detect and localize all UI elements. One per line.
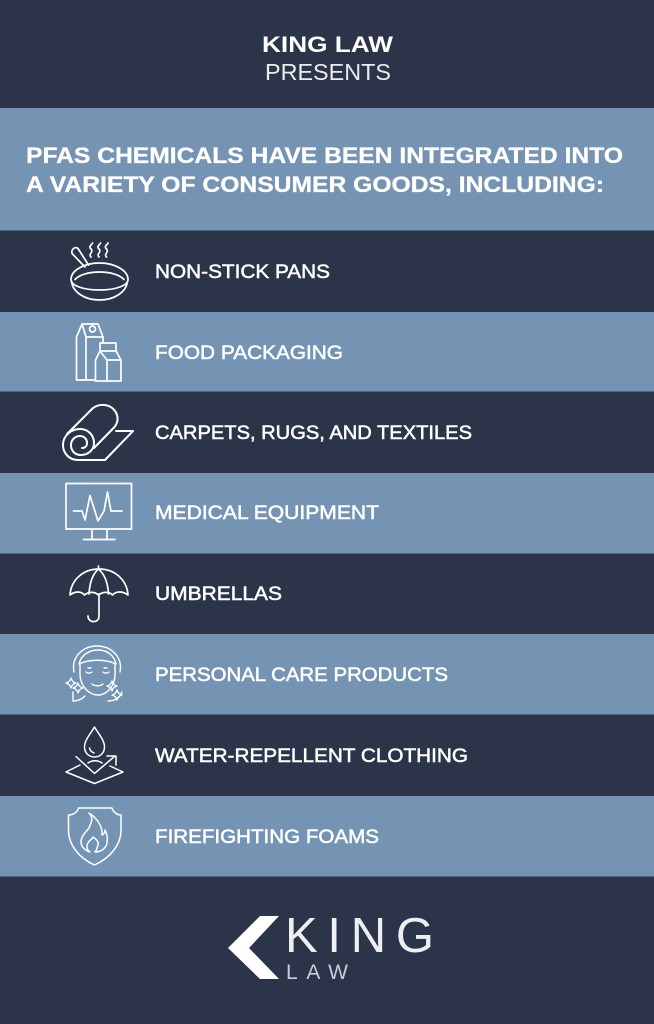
header: King Law presents: PRESENTS — [265, 59, 391, 85]
icon: frying pan — [71, 243, 128, 300]
row: water-repellent clothing: WATER-REPELLENT CLOTHING — [155, 746, 468, 767]
row: medical equipment — [0, 473, 654, 554]
row: umbrellas — [0, 554, 654, 634]
row: personal care products — [0, 634, 654, 714]
logo chevron — [228, 916, 279, 979]
icon: water drop on fabric — [66, 727, 123, 784]
row: non-stick pans — [0, 231, 654, 312]
panel: heading — [0, 108, 654, 230]
icon: face with sparkles — [66, 646, 122, 701]
icon: rolled carpet — [63, 405, 133, 460]
row: personal care products: PERSONAL CARE PRODUCTS — [155, 665, 448, 686]
icon: milk cartons — [76, 324, 121, 381]
row: non-stick pans: NON-STICK PANS — [155, 262, 330, 283]
logo: King Law — [228, 909, 434, 984]
row: umbrellas: UMBRELLAS — [155, 584, 282, 605]
row: water-repellent clothing — [0, 715, 654, 796]
logo: King Law: KING — [285, 909, 434, 963]
logo: King Law: LAW — [286, 961, 348, 984]
row: medical equipment: MEDICAL EQUIPMENT — [155, 503, 379, 524]
row: carpets, rugs, and textiles — [0, 392, 654, 472]
row: firefighting foams: FIREFIGHTING FOAMS — [155, 827, 379, 848]
row: firefighting foams — [0, 796, 654, 876]
header: King Law presents — [0, 0, 654, 108]
row: carpets, rugs, and textiles: CARPETS, RUGS, AND TEXTILES — [155, 423, 472, 444]
icon: umbrella — [70, 566, 128, 622]
row: food packaging — [0, 312, 654, 392]
header: King Law presents: KING LAW — [262, 32, 394, 57]
icon: heart monitor — [66, 484, 132, 540]
row: food packaging: FOOD PACKAGING — [155, 343, 343, 364]
panel: heading: PFAS CHEMICALS HAVE BEEN INTEGRATED INTO — [26, 143, 623, 168]
icon: flame on shield — [68, 808, 121, 865]
panel: heading: A VARIETY OF CONSUMER GOODS, INCLUDING: — [26, 172, 604, 197]
